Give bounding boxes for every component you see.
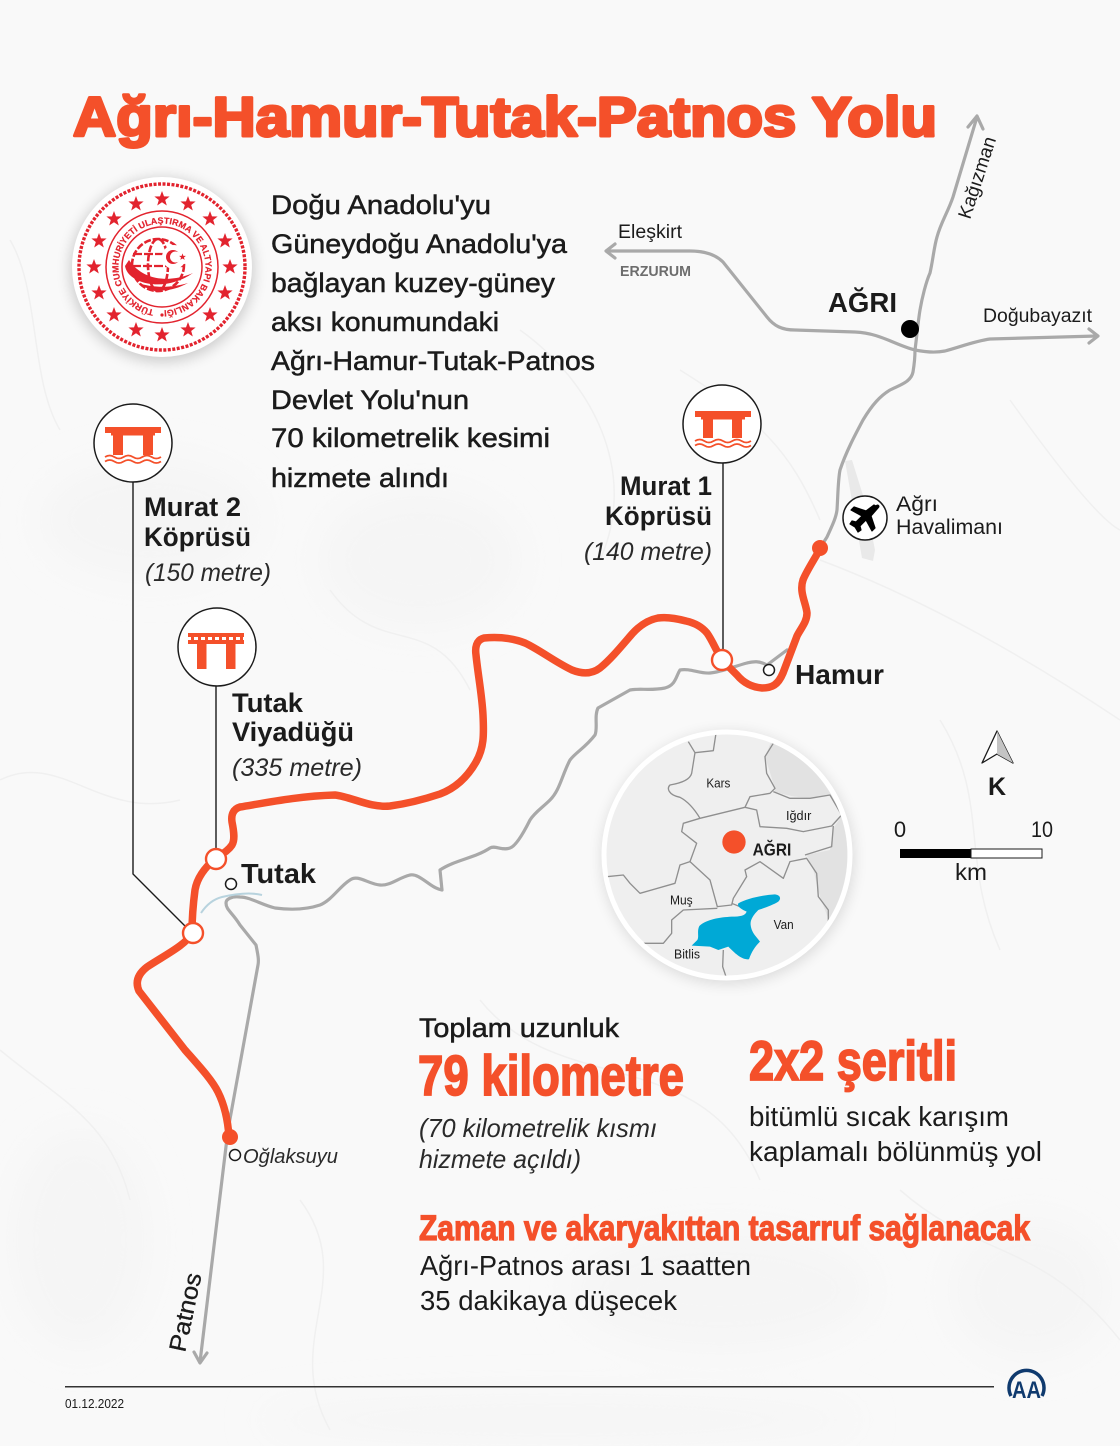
intro text: bağlayan kuzey-güney (271, 268, 556, 298)
label: Murat 1 Köprüsü: Köprüsü (605, 501, 712, 531)
direction labels: Doğubayazıt (983, 306, 1093, 327)
locator map: Muş (670, 893, 693, 907)
label: Tutak Viyadüğü: Tutak (232, 688, 304, 718)
stat: lanes: bitümlü sıcak karışım (749, 1101, 1009, 1132)
label: Murat 2 Köprüsü: (150 metre) (145, 559, 271, 587)
label: Murat 2 Köprüsü: Murat 2 (144, 492, 241, 522)
stat: total length: Toplam uzunluk (419, 1013, 620, 1043)
icon: Tutak viaduct (178, 608, 256, 686)
stat: lanes (749, 1029, 1042, 1167)
route endpoint: south (222, 1129, 238, 1145)
road: Erzurum direction (607, 251, 1097, 352)
intro text: 70 kilometrelik kesimi (271, 423, 550, 453)
stat: savings: 35 dakikaya düşecek (420, 1285, 678, 1316)
label: Murat 1 Köprüsü (584, 471, 712, 566)
river (201, 894, 262, 913)
title: Ağrı-Hamur-Tutak-Patnos Yolu (73, 85, 937, 148)
grey roads (194, 116, 1098, 1363)
label: Tutak Viyadüğü: (335 metre) (232, 754, 362, 782)
stat: total length (418, 1013, 684, 1174)
locator map: Iğdır (786, 809, 811, 823)
scale bar: 10 (1031, 817, 1053, 842)
date: 01.12.2022 (65, 1397, 124, 1411)
scale bar (894, 817, 1053, 885)
scale bar: 0 (894, 817, 906, 842)
locator map: AĞRI (753, 839, 791, 859)
locator map (602, 732, 860, 984)
route endpoint: north (812, 540, 828, 556)
Van lake (692, 894, 780, 959)
north arrow (982, 731, 1013, 801)
stat: total length: hizmete açıldı) (419, 1144, 581, 1174)
direction labels: ERZURUM (620, 264, 691, 280)
icon: airplane (843, 496, 887, 540)
intro text: Güneydoğu Anadolu'ya (271, 229, 568, 259)
intro text: Ağrı-Hamur-Tutak-Patnos (271, 346, 595, 376)
direction labels (164, 134, 1093, 1354)
intro text (271, 190, 595, 493)
direction labels: Kağızman (955, 134, 1001, 222)
label: Murat 1 Köprüsü: (140 metre) (584, 538, 712, 566)
label: Murat 1 Köprüsü: Murat 1 (620, 471, 712, 501)
stat: lanes: kaplamalı bölünmüş yol (749, 1136, 1042, 1167)
footer rule (65, 1386, 994, 1388)
road: Kağızman to Oğlaksuyu start (820, 117, 977, 548)
stat: savings: Ağrı-Patnos arası 1 saatten (420, 1250, 751, 1281)
locator map: Van (774, 918, 794, 932)
bridge marker: Murat 1 (712, 650, 732, 670)
label: Tutak Viyadüğü: Viyadüğü (232, 717, 354, 747)
intro text: Doğu Anadolu'yu (271, 190, 491, 220)
label: Murat 2 Köprüsü: Köprüsü (144, 522, 251, 552)
town: Tutak: Tutak (241, 858, 316, 889)
bridge marker: Tutak (206, 849, 226, 869)
locator map: Kars (706, 777, 730, 791)
stat: lanes: 2x2 şeritli (749, 1029, 957, 1092)
stat: total length: (70 kilometrelik kısmı (419, 1113, 657, 1143)
scale bar: km (955, 859, 987, 885)
logo: AA: AA (1012, 1377, 1041, 1404)
ministry seal: TÜRKİYE CUMHURİYETİ ULAŞTIRMA VE ALTYAPI BAKANLIĞI (112, 217, 212, 318)
locator map: Bitlis (674, 948, 700, 962)
airport: Ağrı (896, 493, 938, 516)
icon: Murat 1 bridge (683, 385, 761, 463)
direction labels: Eleşkirt (618, 222, 683, 243)
orange route (137, 549, 820, 1137)
town: Oğlaksuyu: Oğlaksuyu (243, 1146, 338, 1168)
arrowheads (194, 116, 1098, 1363)
town: Ağrı (828, 287, 919, 338)
intro text: Devlet Yolu'nun (271, 385, 469, 415)
logo: AA (1009, 1370, 1044, 1404)
stat: savings (419, 1209, 1030, 1316)
airport (843, 493, 1003, 540)
intro text: aksı konumundaki (271, 307, 499, 337)
bridge marker: Murat 2 (183, 923, 203, 943)
label: Tutak Viyadüğü (232, 688, 362, 782)
town: Ağrı: AĞRI (828, 287, 897, 318)
ministry seal (64, 172, 260, 368)
leader lines (133, 462, 723, 929)
town: Hamur: Hamur (795, 659, 884, 690)
intro text: hizmete alındı (271, 463, 449, 493)
stat: total length: 79 kilometre (418, 1044, 684, 1108)
icon: Murat 2 bridge (94, 404, 172, 482)
direction labels: Patnos (164, 1270, 208, 1354)
label: Murat 2 Köprüsü (144, 492, 271, 587)
stat: savings: Zaman ve akaryakıttan tasarruf sağlanacak (419, 1209, 1030, 1248)
airport area (845, 460, 875, 561)
north arrow: K (988, 773, 1006, 801)
road: Hamur to Tutak and Patnos (200, 650, 787, 1362)
airport: Havalimanı (896, 516, 1003, 539)
